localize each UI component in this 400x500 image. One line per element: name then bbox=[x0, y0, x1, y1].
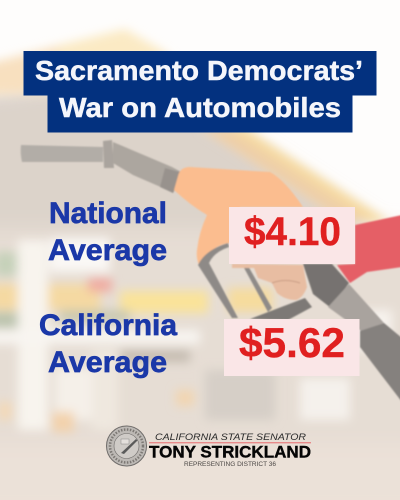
red sleeve bbox=[337, 215, 400, 283]
nozzle spout bbox=[21, 145, 103, 162]
label: california average: Average bbox=[48, 346, 167, 379]
trigger guard bbox=[198, 243, 238, 318]
silver band bbox=[328, 284, 384, 331]
hand bbox=[232, 264, 307, 300]
senator signature block bbox=[149, 432, 311, 468]
senator signature block: TONY STRICKLAND bbox=[149, 444, 311, 462]
title banner line 2: War on Automobiles bbox=[59, 92, 341, 123]
black grip bbox=[303, 264, 349, 308]
label: california average: California bbox=[39, 309, 177, 342]
price box: national: $4.10 bbox=[244, 210, 341, 254]
orange handle bbox=[174, 167, 303, 265]
title banner line 1: Sacramento Democrats’ bbox=[35, 55, 363, 86]
canopy edge bbox=[0, 29, 390, 222]
icon: state senate seal bbox=[106, 426, 146, 466]
title banner line 2 bbox=[48, 92, 352, 132]
station blurred lights and columns bbox=[0, 238, 392, 432]
senator signature block: REPRESENTING DISTRICT 36 bbox=[184, 461, 276, 468]
label: california average bbox=[39, 309, 177, 379]
dark hose end bbox=[360, 323, 400, 402]
trigger bbox=[250, 298, 312, 320]
label: national average: Average bbox=[48, 234, 167, 267]
icon: fuel nozzle and hand bbox=[21, 140, 400, 402]
senator signature block: CALIFORNIA STATE SENATOR bbox=[155, 432, 306, 443]
lever bbox=[243, 264, 272, 312]
label: national average: National bbox=[49, 197, 167, 230]
price box: california: $5.62 bbox=[239, 319, 345, 366]
price box: california bbox=[224, 319, 360, 376]
title banner line 1 bbox=[24, 51, 376, 96]
label: national average bbox=[48, 197, 167, 267]
price box: national bbox=[229, 207, 355, 264]
